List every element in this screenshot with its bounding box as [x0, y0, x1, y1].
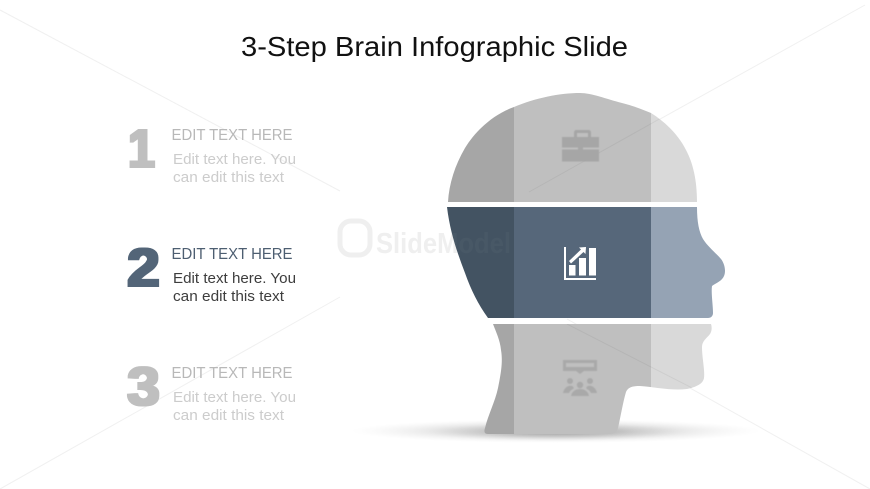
title: 3-Step Brain Infographic Slide — [241, 31, 628, 62]
step 3 body: can edit this text — [173, 408, 284, 424]
head top segment — [448, 93, 697, 202]
step 2 body: can edit this text — [173, 289, 284, 305]
icon: presentation audience — [563, 360, 597, 396]
step 3 heading: EDIT TEXT HERE — [172, 365, 292, 382]
watermark logo — [340, 221, 511, 260]
head middle segment — [447, 207, 725, 318]
step 3 number: 3 — [127, 357, 160, 417]
watermark logo: SlideModel — [376, 228, 511, 260]
step 2 number: 2 — [127, 238, 160, 298]
head shadow — [351, 419, 761, 443]
head bottom segment — [480, 322, 716, 436]
icon: bar chart with arrow — [564, 247, 596, 280]
icon: briefcase — [562, 130, 599, 162]
step 1 number: 1 — [128, 119, 155, 179]
step 3 body: Edit text here. You — [173, 390, 296, 406]
step 1 body: can edit this text — [173, 170, 284, 186]
step 2 text block — [127, 238, 296, 305]
step 3 text block — [127, 357, 296, 424]
step 1 heading: EDIT TEXT HERE — [172, 127, 292, 144]
step 2 heading: EDIT TEXT HERE — [172, 246, 292, 263]
step 2 body: Edit text here. You — [173, 271, 296, 287]
step 1 body: Edit text here. You — [173, 152, 296, 168]
step 1 text block — [128, 119, 296, 186]
head middle segment: SlideModel — [376, 228, 511, 260]
